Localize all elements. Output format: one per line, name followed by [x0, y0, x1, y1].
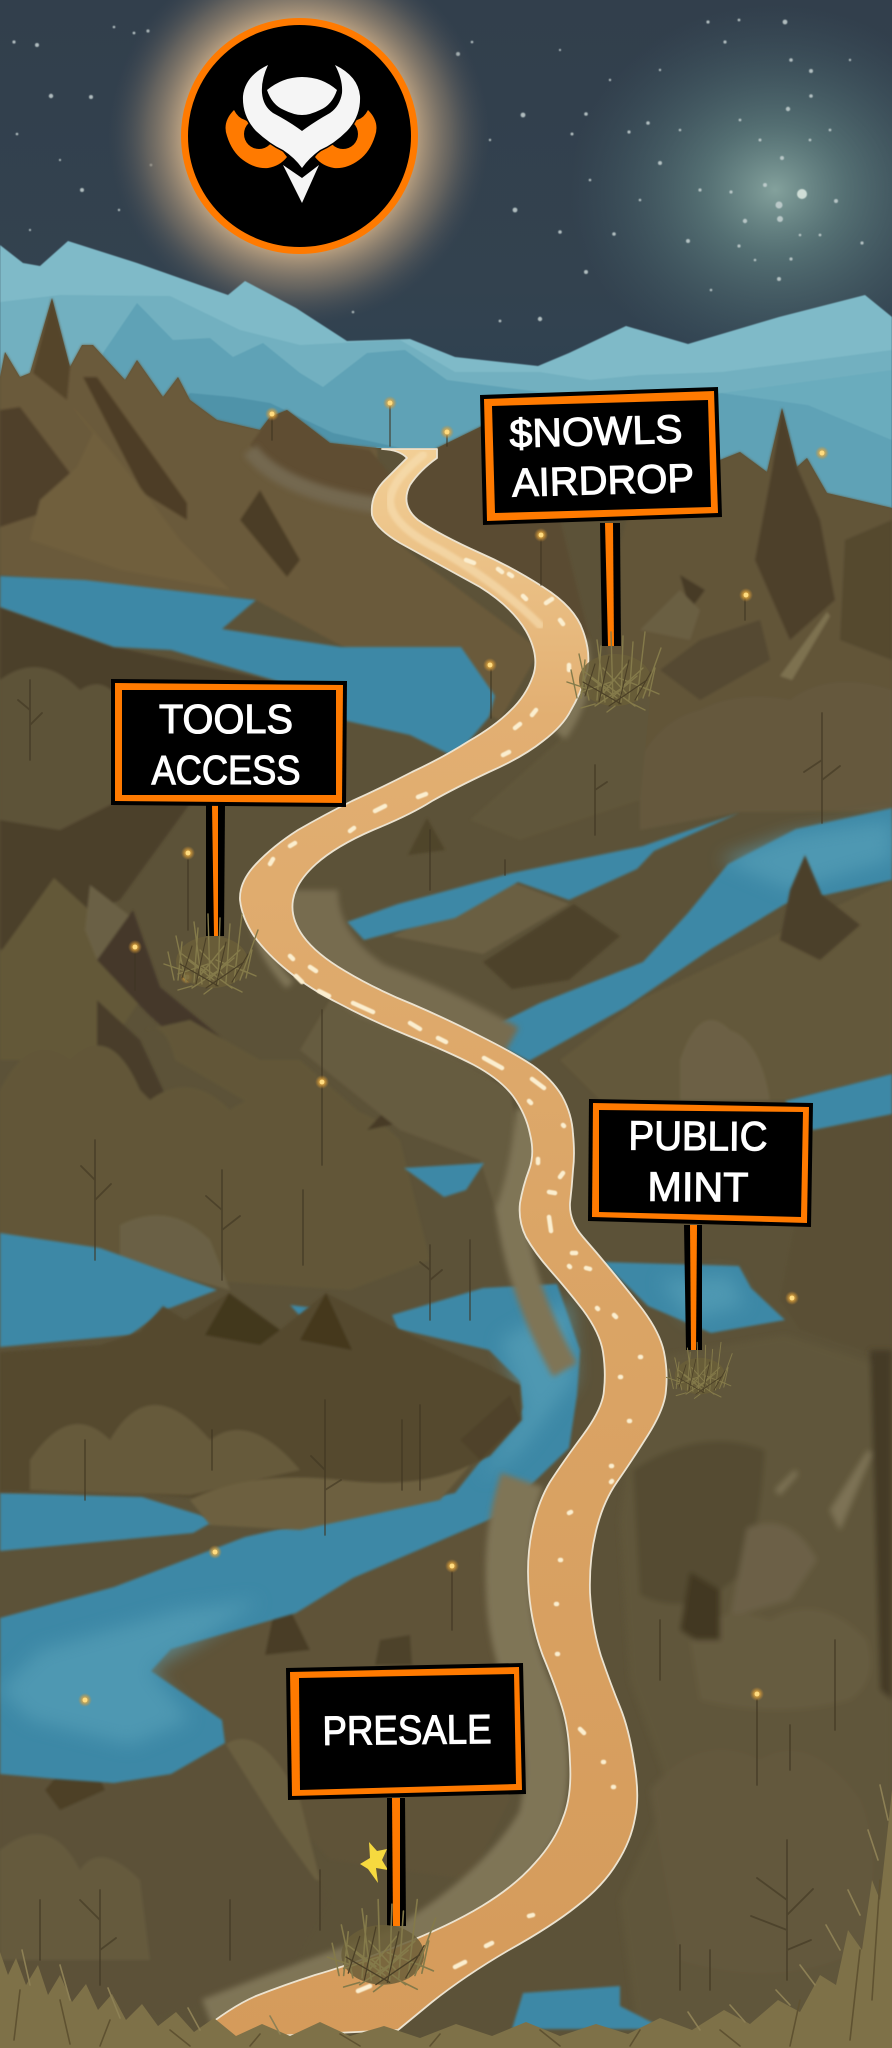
sign: $NOWLS airdrop — [480, 387, 722, 712]
pole — [600, 523, 621, 646]
trees and lamp posts — [18, 405, 840, 1990]
sign text — [628, 1113, 768, 1210]
sign: presale — [286, 1663, 526, 1992]
pole — [684, 1225, 702, 1350]
foreground dry grass — [0, 1785, 892, 2048]
sign text: MINT — [647, 1164, 749, 1210]
stars — [12, 19, 864, 322]
distant blue mountains — [0, 241, 892, 540]
icon: owl face — [243, 65, 360, 203]
sign text: PUBLIC — [628, 1113, 768, 1159]
sign board — [111, 679, 347, 807]
sign text: ACCESS — [152, 747, 300, 793]
logo halo — [109, 0, 489, 326]
pole — [387, 1798, 406, 1926]
sign text — [152, 696, 300, 793]
winding road — [190, 449, 667, 2040]
lamp lights — [78, 396, 829, 1707]
sign board — [588, 1099, 813, 1227]
road light dashes — [270, 560, 641, 1991]
hill between the rivers with peaks — [0, 1293, 522, 1530]
soft hills on the lower right — [620, 1335, 892, 2048]
sign: public mint — [588, 1099, 813, 1398]
icon: owl eyes — [226, 110, 376, 168]
grass tuft — [666, 1342, 732, 1398]
logo: owl badge — [184, 22, 414, 250]
sign board — [480, 387, 722, 525]
sign text: $NOWLS — [509, 408, 683, 456]
glowing upper road centre — [390, 455, 540, 625]
peak over right river — [780, 855, 860, 960]
sign board — [286, 1663, 526, 1800]
pole — [206, 805, 225, 936]
sign text: TOOLS — [159, 696, 293, 742]
icon: yellow star — [360, 1842, 388, 1883]
grass tuft — [328, 1900, 436, 1992]
sign text: PRESALE — [322, 1706, 492, 1754]
badge disc — [184, 22, 414, 250]
sign text: AIRDROP — [511, 456, 695, 506]
grass tuft — [567, 632, 661, 712]
sign text — [509, 408, 695, 506]
night sky background — [0, 0, 892, 520]
road shoulders — [210, 450, 583, 2020]
grass tuft — [164, 914, 258, 994]
lighter water highlights — [0, 820, 892, 1745]
sign: tools access — [111, 679, 347, 994]
rivers and lakes — [0, 576, 892, 2029]
